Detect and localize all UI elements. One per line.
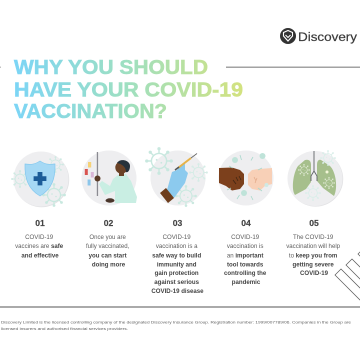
logo: Discovery (280, 28, 358, 44)
decorative outlined diagonal bars (334, 252, 360, 300)
text block 1: and effective (21, 252, 59, 260)
footer disclaimer: licensed insurers and authorised financial services providers. (1, 326, 128, 331)
text block 2: you can start (89, 252, 127, 260)
text block 3: immunity and (157, 262, 197, 268)
text block 4: pandemic (232, 279, 261, 286)
text block 3: COVID-19 disease (151, 288, 204, 295)
number 02: 02 (104, 218, 113, 228)
text block 3: COVID-19 (163, 234, 191, 241)
text block 4: vaccination is (227, 243, 263, 250)
icon: lungs (288, 150, 343, 207)
text block 5: vaccination will help (286, 243, 341, 250)
logo: Discovery: Discovery (298, 30, 358, 44)
text block 4: an important (227, 252, 263, 260)
panel 4: tool towards controlling the pandemic (218, 150, 274, 286)
title: VACCINATION? (14, 100, 167, 123)
icon: shield with viruses (11, 152, 69, 207)
number 04: 04 (241, 218, 251, 228)
footer disclaimer: Discovery Limited is the licensed controlling company of the designated Discovery Insurance Group. Registration number: 1999/007789/06. Companies in the Group are (1, 320, 351, 324)
panel 2: start doing more (82, 150, 137, 268)
text block 3: against serious (154, 279, 200, 286)
text block 2: doing more (92, 262, 126, 268)
title (14, 56, 243, 123)
panel 5: keep you from getting severe (286, 150, 343, 277)
title: HAVE YOUR COVID-19 (14, 78, 243, 102)
number 03: 03 (173, 218, 182, 228)
title: WHY YOU SHOULD (14, 56, 208, 79)
text block 5: COVID-19 (300, 270, 329, 277)
panel 3: safe way to build immunity (145, 147, 208, 295)
text block 5: getting severe (292, 262, 334, 268)
panel 1: safe and effective (11, 152, 69, 260)
text block 2: fully vaccinated, (86, 243, 130, 250)
text block 4: tool towards (227, 262, 264, 268)
text block 4: controlling the (224, 270, 267, 277)
number 05: 05 (309, 218, 319, 228)
text block 3: gain protection (155, 270, 199, 277)
number 01: 01 (35, 218, 45, 228)
text block 3: safe way to build (152, 252, 201, 260)
text block 1: COVID-19 (25, 234, 54, 241)
text block 2: Once you are (89, 234, 127, 241)
text block 1: vaccines are safe (15, 243, 63, 250)
text block 5: to keep you from (289, 252, 337, 260)
text block 3: vaccination is a (156, 243, 198, 250)
icon: person at board (82, 150, 137, 206)
text block 5: The COVID-19 (293, 234, 334, 241)
text block 4: COVID-19 (231, 234, 260, 241)
icon: gloved hand with syringe (145, 147, 208, 207)
icon: fist bump (218, 150, 274, 206)
